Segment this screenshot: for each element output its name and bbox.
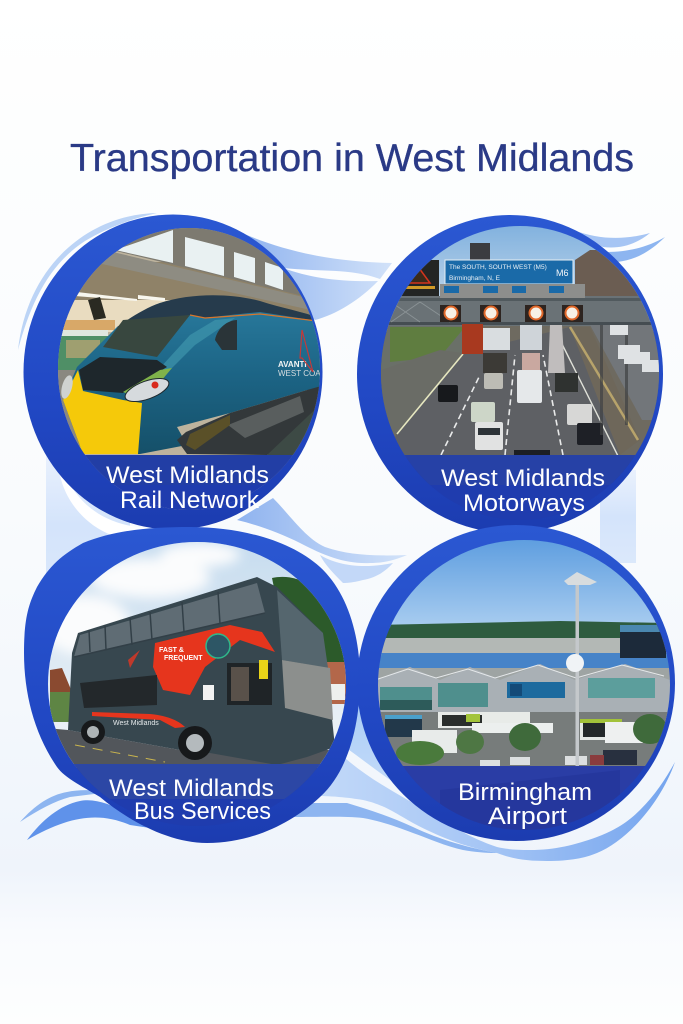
bus livery text: West Midlands [113, 720, 159, 727]
swoosh: bottom left [20, 790, 150, 840]
swoosh: top-left crescent [18, 213, 157, 350]
swoosh: bottom right tail [290, 803, 497, 853]
ring [24, 527, 360, 843]
white crescent under top-left ring [60, 470, 147, 537]
label: bus: Bus Services [134, 798, 271, 825]
light vertical bar left [46, 450, 130, 600]
ring [357, 215, 663, 533]
panel: Birmingham Airport [357, 525, 675, 841]
ring [24, 214, 322, 530]
photo: Avanti train [58, 228, 320, 510]
photo: double decker bus: FREQUENT [164, 655, 203, 662]
photo: Avanti train: WEST COAST [278, 369, 331, 378]
photo: double decker bus [48, 542, 346, 804]
title: Transportation in West Midlands [70, 137, 634, 180]
swoosh: top centre [240, 232, 392, 320]
photo: motorway: M6 [556, 268, 569, 278]
sign text: The SOUTH, SOUTH WEST (M5) [449, 264, 547, 271]
photo: motorway [381, 226, 659, 494]
swoosh: bottom right lower band [290, 758, 675, 861]
label: airport [458, 779, 592, 830]
label: rail: West Midlands [106, 462, 269, 489]
label: airport: Birmingham [458, 779, 592, 806]
label: rail [106, 462, 269, 514]
label: motorways: Motorways [463, 490, 585, 517]
label: bus: West Midlands [109, 775, 274, 802]
swoosh: middle [237, 498, 407, 583]
label: motorways [441, 465, 605, 517]
light vertical bar right [600, 470, 636, 563]
swoosh: bottom right upper band [345, 697, 440, 800]
panel: West Midlands Rail Network [24, 214, 331, 530]
ring [357, 525, 675, 841]
label: bus [109, 775, 274, 825]
panel: West Midlands Bus Services [24, 527, 360, 843]
panel: West Midlands Motorways [357, 215, 665, 533]
label: rail: Rail Network [120, 487, 260, 514]
livery wordmark: AVANTI [278, 360, 307, 369]
photo: motorway: Birmingham, N, E [449, 275, 501, 282]
photo: airport terminal [375, 538, 675, 836]
infographic canvas [0, 142, 683, 920]
label: airport: Airport [488, 803, 567, 830]
label: motorways: West Midlands [441, 465, 605, 492]
swoosh: top right [573, 230, 665, 262]
photo: double decker bus: FAST & [159, 647, 184, 654]
